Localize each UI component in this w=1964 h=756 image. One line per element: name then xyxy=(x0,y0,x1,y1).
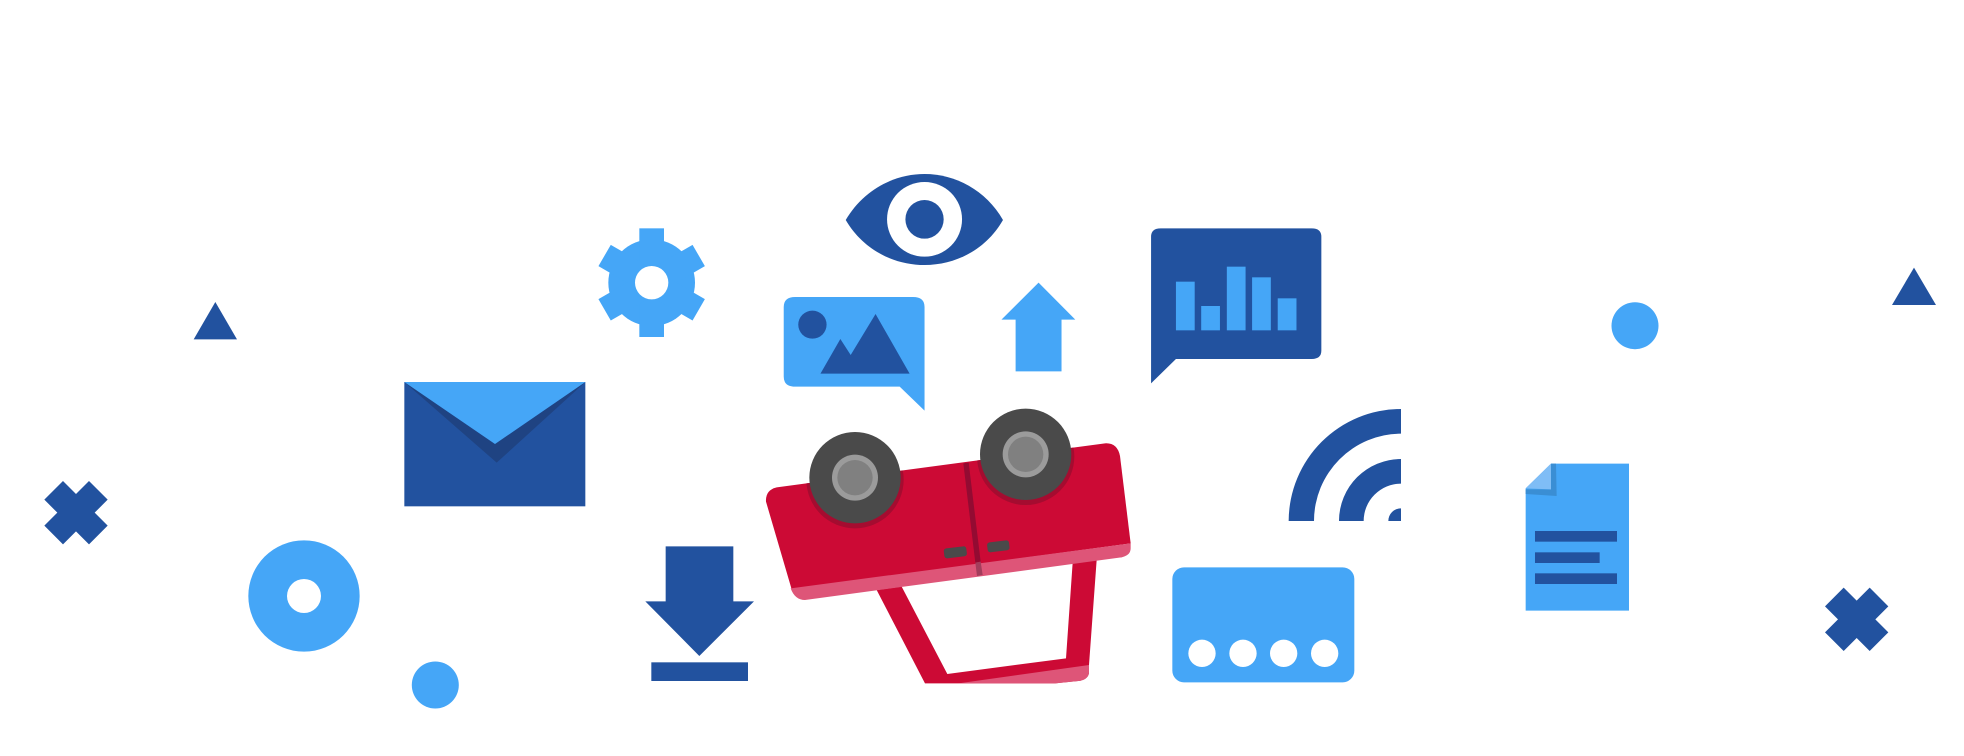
car body xyxy=(766,443,1131,600)
icon: document xyxy=(1526,464,1629,611)
icon: top-left triangle xyxy=(194,302,237,339)
icon: chart speech bubble xyxy=(1151,228,1321,383)
icon: image speech bubble xyxy=(784,297,925,411)
icon: right cross xyxy=(1825,588,1888,651)
icon: right circle xyxy=(1612,302,1658,349)
icon: download arrow xyxy=(645,546,754,681)
wheel arch shadows xyxy=(806,448,1074,528)
car: overturned red car xyxy=(766,408,1131,683)
car cabin frame xyxy=(877,560,1097,683)
door handles xyxy=(943,540,1010,559)
icon: small left circle xyxy=(412,662,459,708)
icon: upload arrow xyxy=(1001,283,1075,371)
icon: eye xyxy=(846,174,1003,265)
icon: envelope xyxy=(404,382,585,506)
icon: gear xyxy=(598,228,705,337)
icon: ring xyxy=(248,540,360,652)
icon: left cross xyxy=(44,481,108,544)
icon: top-right triangle xyxy=(1892,268,1936,305)
icon: keypad card xyxy=(1172,567,1354,682)
illustration: overturned car with floating icons xyxy=(44,174,1936,708)
rear wheel xyxy=(809,432,901,523)
icon: wifi signal xyxy=(1289,409,1401,521)
front wheel xyxy=(980,409,1071,500)
